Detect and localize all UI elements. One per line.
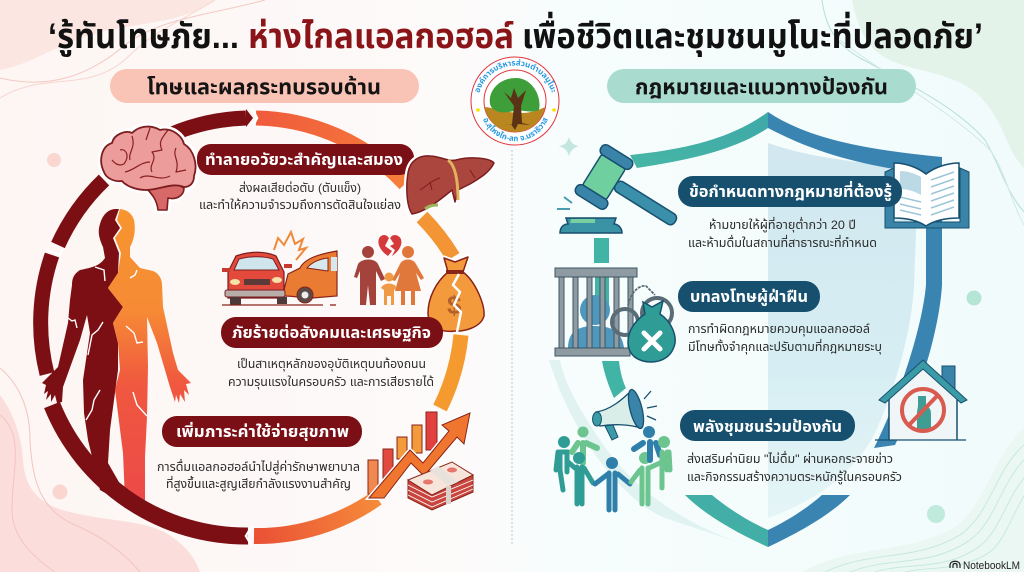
- label: social and economic harm: [221, 317, 443, 348]
- text: health costs description: ที่สูงขึ้นและสูญเสียกำลังแรงงานสำคัญ: [166, 475, 351, 491]
- icon: car crash: [222, 232, 337, 305]
- heading pill: harms: [110, 69, 419, 103]
- shield graphic: [549, 112, 942, 547]
- text: health costs description: การดื่มแอลกอฮอล์นำไปสู่ค่ารักษาพยาบาล: [157, 458, 360, 474]
- text: organ damage description: ส่งผลเสียต่อตับ (ตับแข็ง): [239, 181, 361, 195]
- text: social and economic harm description: เป็นสาเหตุหลักของอุบัติเหตุบนท้องถนน: [237, 357, 426, 371]
- heading pill: law: [607, 69, 916, 103]
- center dashed divider: [511, 150, 513, 545]
- title: ห่างไกลแอลกอฮอล์: [248, 17, 514, 56]
- icon: broken money bag: [428, 257, 484, 332]
- label: health costs: เพิ่มภาระค่าใช้จ่ายสุขภาพ: [176, 421, 349, 441]
- label: legal requirements: ข้อกำหนดทางกฎหมายที่ต้องรู้: [689, 180, 892, 202]
- icon: open book: [885, 163, 969, 228]
- icon: community circle of people: [556, 426, 670, 510]
- icon: megaphone: [592, 388, 657, 440]
- label: community power: พลังชุมชนร่วมป้องกัน: [693, 418, 842, 436]
- icon: broken money bag: $: [447, 290, 462, 320]
- label: penalties: บทลงโทษผู้ฝ่าฝืน: [690, 288, 808, 307]
- heading pill: harms: โทษและผลกระทบรอบด้าน: [147, 76, 381, 99]
- label: legal requirements: [678, 176, 902, 207]
- icon: handcuffs and fine bag: [612, 286, 675, 362]
- label: penalties: [678, 281, 820, 312]
- logo: Muno subdistrict organization: องค์การบริหารส่วนตำบลมูโนะ: [476, 58, 555, 93]
- label: health costs: [162, 416, 362, 447]
- text: penalties description: มีโทษทั้งจำคุกและปรับตามที่กฎหมายระบุ: [688, 338, 882, 354]
- icon: gavel: [557, 143, 691, 246]
- icon: jail cage and person: [555, 268, 637, 356]
- text: penalties description: การทำผิดกฎหมายควบคุมแอลกอฮอล์: [688, 322, 870, 336]
- logo: Muno subdistrict organization: อ.สุไหงโก-ลก จ.นราธิวาส: [484, 117, 548, 142]
- title: เพื่อชีวิตและชุมชนมูโนะที่ปลอดภัย’: [522, 11, 983, 57]
- text: community power description: ส่งเสริมค่านิยม "ไม่ดื่ม" ผ่านหอกระจายข่าว: [687, 450, 893, 466]
- icon: liver: [407, 156, 494, 214]
- circular arrow ring: [41, 108, 461, 546]
- icon: split human body: [42, 209, 191, 510]
- icon: rising cost chart and money: [368, 412, 473, 510]
- label: community power: [680, 410, 855, 441]
- title: ‘รู้ทันโทษภัย...: [48, 17, 239, 57]
- label: organ damage: ทำลายอวัยวะสำคัญและสมอง: [205, 152, 403, 169]
- panel: harms (left): [41, 69, 494, 546]
- label: organ damage: [197, 144, 414, 175]
- icon: no alcohol house: [875, 360, 967, 440]
- text: legal requirements description: และห้ามดื่มในสถานที่สาธารณะที่กำหนด: [688, 234, 877, 250]
- icon: brain: [101, 127, 196, 210]
- heading pill: law: กฎหมายและแนวทางป้องกัน: [635, 76, 888, 99]
- label: social and economic harm: ภัยร้ายต่อสังคมและเศรษฐกิจ: [232, 324, 431, 342]
- text: community power description: และกิจกรรมสร้างความตระหนักรู้ในครอบครัว: [687, 470, 902, 484]
- text: social and economic harm description: ความรุนแรงในครอบครัว และการเสียรายได้: [228, 375, 434, 389]
- logo: Muno subdistrict organization: [470, 56, 560, 146]
- text: organ damage description: และทำให้ความจำรวมถึงการตัดสินใจแย่ลง: [199, 198, 401, 212]
- text: legal requirements description: ห้ามขายให้ผู้ที่อายุต่ำกว่า 20 ปี: [709, 216, 856, 232]
- panel: law and prevention (right): [549, 69, 969, 547]
- watermark: NotebookLM: NotebookLM: [963, 560, 1020, 572]
- icon: broken family: [354, 235, 424, 305]
